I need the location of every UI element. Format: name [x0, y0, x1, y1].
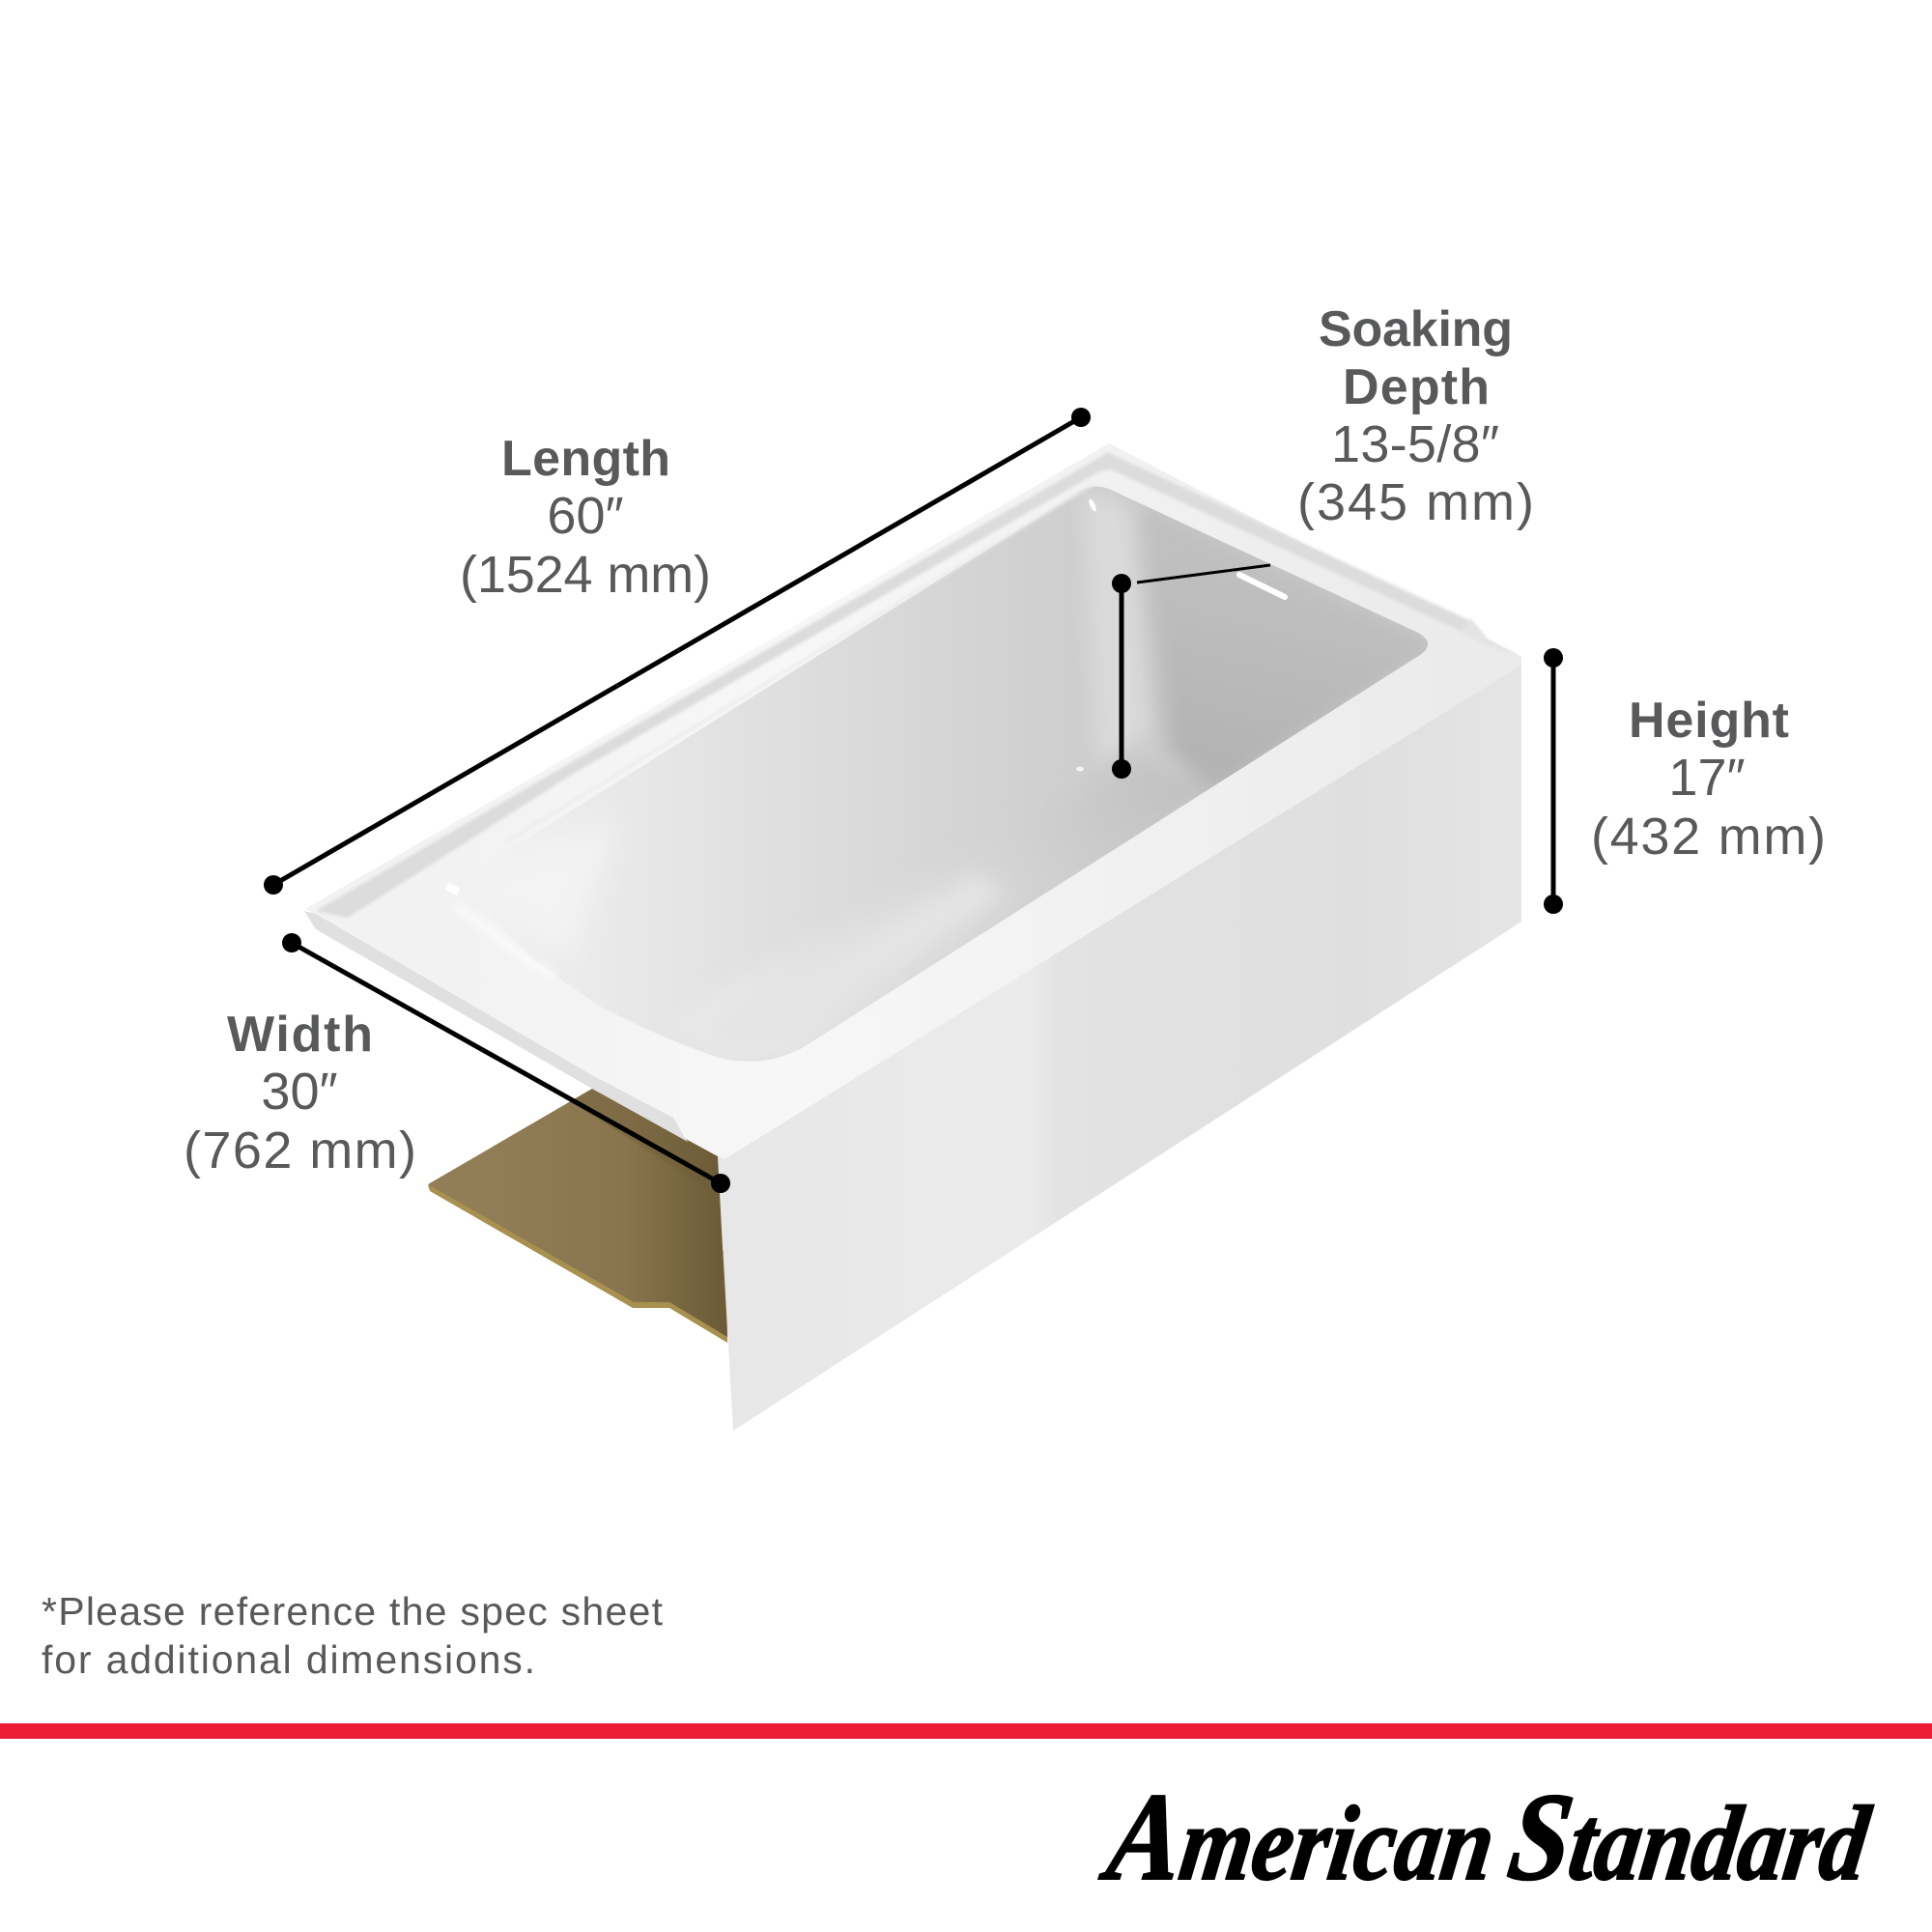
- label: height: 17″: [1668, 749, 1746, 807]
- label: length: Length: [501, 431, 670, 487]
- overflow slot: [1239, 575, 1285, 597]
- highlight: drain area: [1076, 767, 1084, 771]
- apron front panel: [718, 665, 1521, 1431]
- basin end wall: [1146, 513, 1428, 790]
- logo: American Standard: American: [1094, 1769, 1504, 1907]
- backrest highlight: [459, 908, 553, 974]
- logo: American Standard: Standard: [1501, 1769, 1880, 1907]
- label: soaking depth: [1297, 301, 1534, 531]
- rim underside: [304, 911, 688, 1142]
- dimension line: height: [1544, 648, 1563, 914]
- label: length: [460, 431, 711, 604]
- highlight: backrest top: [445, 883, 460, 895]
- tile flange band: [316, 452, 1521, 918]
- basin: [566, 487, 1428, 1062]
- red divider bar: [0, 1723, 1932, 1739]
- label: soaking depth: 13-5/8″: [1331, 415, 1499, 473]
- label: length: 60″: [547, 487, 624, 545]
- label: height: (432 mm): [1591, 808, 1826, 866]
- label: soaking depth: Soaking: [1319, 301, 1513, 357]
- label: height: [1591, 693, 1826, 866]
- label: width: (762 mm): [184, 1122, 416, 1179]
- highlight: far corner: [1088, 498, 1097, 512]
- label: width: 30″: [261, 1063, 338, 1121]
- footnote: [42, 1589, 664, 1682]
- wood support panel: [428, 1089, 727, 1343]
- basin far corner shading: [1087, 497, 1147, 752]
- footnote: for additional dimensions.: [42, 1637, 535, 1682]
- label: width: [184, 1007, 416, 1179]
- label: width: Width: [227, 1007, 373, 1063]
- label: height: Height: [1629, 693, 1789, 749]
- footnote: *Please reference the spec sheet: [42, 1589, 664, 1634]
- tub deck: [305, 443, 1521, 1159]
- dimension line: width: [282, 933, 730, 1193]
- dimension line: length: [264, 408, 1091, 895]
- floor slip-resistant texture: [915, 881, 991, 935]
- label: soaking depth: (345 mm): [1297, 473, 1534, 531]
- label: length: (1524 mm): [460, 546, 711, 604]
- logo: American Standard: [1094, 1769, 1880, 1907]
- basin floor: [1163, 786, 1196, 819]
- dimension line: soaking depth: [1112, 565, 1270, 779]
- far wall rim highlight: [505, 483, 1094, 842]
- label: soaking depth: Depth: [1343, 359, 1490, 415]
- bathtub illustration: [304, 443, 1521, 1431]
- basin left backrest shading: [454, 821, 618, 956]
